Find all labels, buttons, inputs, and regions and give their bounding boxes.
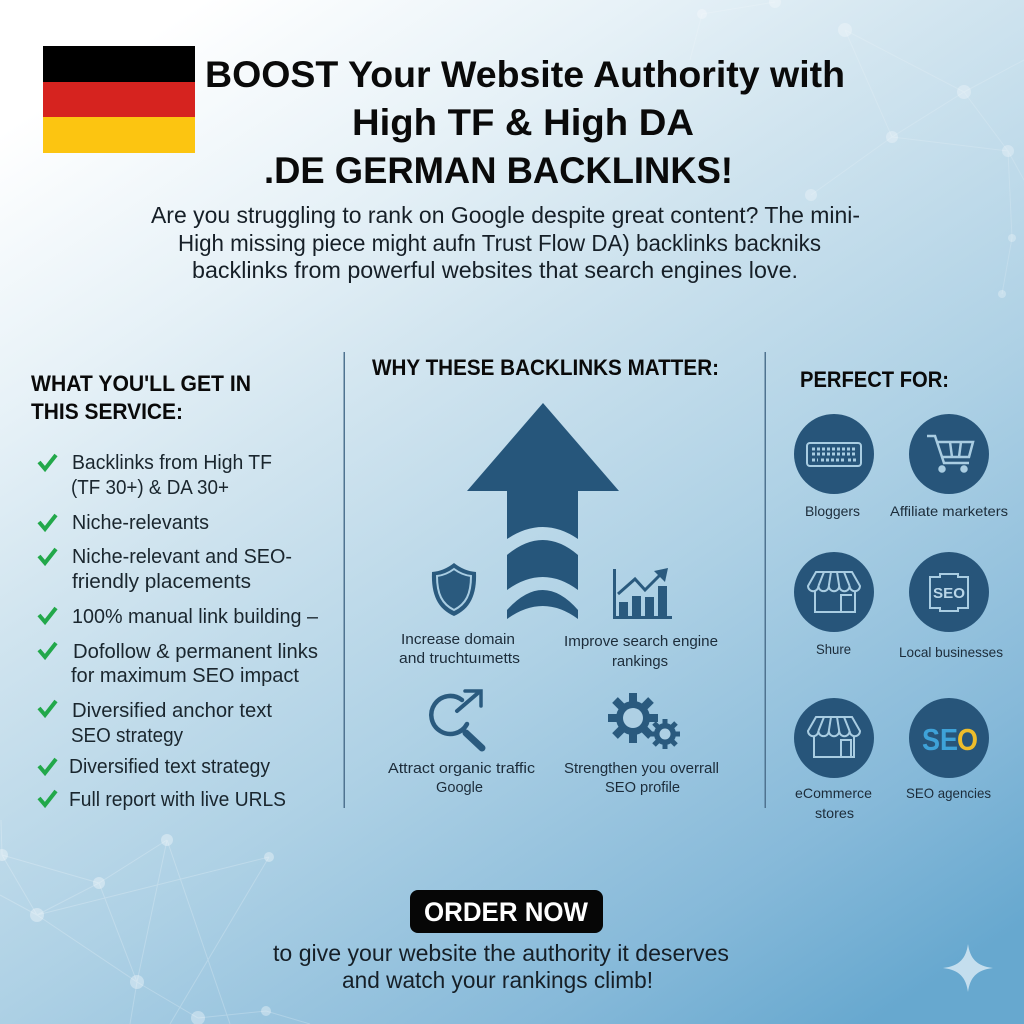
intro text: backlinks from powerful websites that search engines love.: [192, 257, 798, 283]
icon: sparkle: [943, 944, 993, 992]
divider right: [764, 352, 766, 808]
divider left: [344, 352, 345, 808]
heading: perfect for: PERFECT FOR:: [800, 367, 949, 392]
icon: seo badge: SE: [922, 722, 958, 757]
closing text: to give your website the authority it deserves: [273, 940, 729, 966]
closing text: and watch your rankings climb!: [342, 967, 653, 993]
closing text: [273, 940, 729, 993]
text: organic traffic: Google: [436, 779, 483, 796]
label: ecommerce stores: eCommerce: [795, 785, 872, 801]
service list: Backlinks from High TF: [72, 452, 272, 474]
label: ecommerce stores: stores: [815, 805, 854, 821]
service list: (TF 30+) & DA 30+: [71, 477, 229, 499]
label: affiliate marketers: Affiliate marketers: [890, 503, 1008, 519]
intro text: Are you struggling to rank on Google despite great content? The mini-: [151, 202, 860, 228]
network decoration bottom left: [0, 820, 310, 1024]
icon: seo chip: SEO: [933, 585, 965, 602]
icon: seo chip: [909, 552, 989, 632]
label: bloggers: Bloggers: [805, 503, 860, 519]
icon: store: [794, 698, 874, 778]
intro text: [151, 202, 860, 283]
text: seo profile: [564, 760, 719, 796]
text: seo profile: SEO profile: [605, 779, 680, 796]
icon: German flag: [43, 46, 195, 153]
service list: 100% manual link building –: [72, 606, 319, 628]
icon: seo badge: O: [957, 722, 978, 757]
heading: what you'll get: WHAT YOU'LL GET IN: [31, 371, 251, 396]
label: ecommerce stores: [795, 785, 872, 821]
panel: why these backlinks matter: [372, 355, 719, 796]
text: improve rankings: Improve search engine: [564, 633, 718, 650]
label: shure: Shure: [816, 641, 851, 657]
service list: Niche-relevant and SEO-: [72, 546, 292, 568]
text: improve rankings: [564, 633, 718, 670]
service list: Diversified text strategy: [69, 756, 270, 778]
title: [205, 54, 845, 191]
title: High TF & High DA: [352, 102, 694, 143]
checkmarks: [39, 455, 56, 805]
text: organic traffic: Attract organic traffic: [388, 760, 536, 777]
service list: [69, 452, 319, 811]
icon: shield: [432, 563, 476, 616]
icon: growth chart: [613, 568, 672, 619]
intro text: High missing piece might aufn Trust Flow DA) backlinks backniks: [178, 230, 821, 256]
title: .DE GERMAN BACKLINKS!: [264, 150, 733, 191]
label: seo agencies: SEO agencies: [906, 785, 991, 801]
text: increase domain: [399, 631, 520, 667]
service list: Niche-relevants: [72, 512, 209, 534]
icon: gears: [608, 693, 680, 749]
icon: cart: [909, 414, 989, 494]
icon: magnifier with arrow: [431, 691, 482, 748]
service list: Full report with live URLS: [69, 789, 286, 811]
icon: up arrow: [467, 403, 619, 619]
text: organic traffic: [388, 760, 536, 796]
service list: Diversified anchor text: [72, 700, 272, 722]
text: increase domain: and truchtuımetts: [399, 650, 520, 667]
label: local businesses: Local businesses: [899, 644, 1003, 660]
button: order now: ORDER NOW: [424, 897, 588, 927]
heading: what you'll get: THIS SERVICE:: [31, 399, 183, 424]
heading: why: WHY THESE BACKLINKS MATTER:: [372, 355, 719, 380]
service list: Dofollow & permanent links: [73, 641, 318, 663]
text: increase domain: Increase domain: [401, 631, 515, 648]
title: BOOST Your Website Authority with: [205, 54, 845, 95]
panel: perfect for: [794, 367, 1008, 821]
icon: shop: [794, 552, 874, 632]
service list: friendly placements: [72, 571, 251, 593]
button: order now: [410, 890, 603, 933]
icon: keyboard: [794, 414, 874, 494]
service list: for maximum SEO impact: [71, 665, 299, 687]
panel: what you'll get: [31, 371, 319, 811]
service list: SEO strategy: [71, 725, 183, 747]
text: seo profile: Strengthen you overrall: [564, 760, 719, 777]
heading: what you'll get: [31, 371, 251, 424]
text: improve rankings: rankings: [612, 653, 668, 670]
network decoration top right: [690, 0, 1024, 298]
icon: seo badge: [909, 698, 989, 778]
